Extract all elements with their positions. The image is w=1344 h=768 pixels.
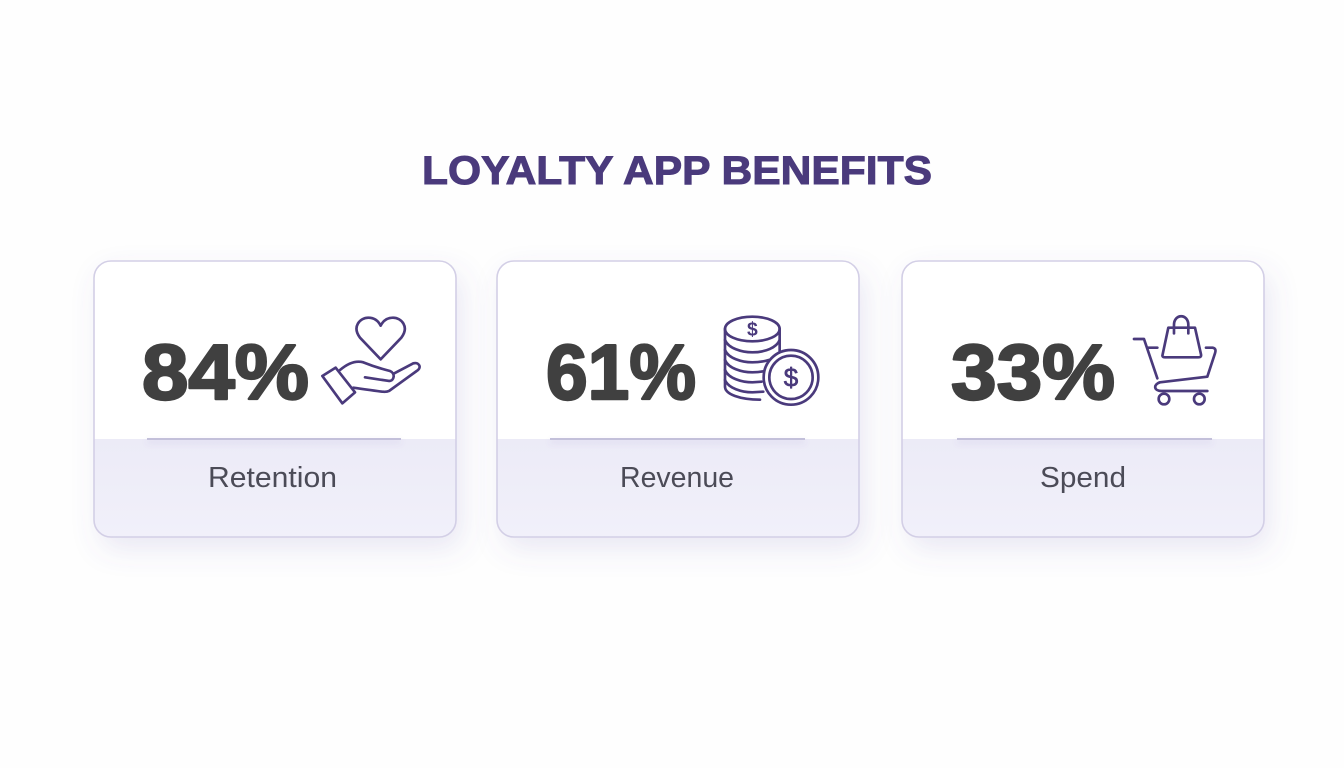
icon: coin stack: [725, 317, 818, 405]
card border: [497, 261, 859, 537]
divider: [550, 438, 805, 440]
stat: 61%: 61%: [546, 328, 696, 416]
card border: [94, 261, 456, 537]
panel: spend: [902, 261, 1264, 537]
card border: [902, 261, 1264, 537]
stat: 33%: 33%: [951, 328, 1115, 416]
divider: [147, 438, 401, 440]
panel: retention: [94, 261, 456, 537]
card lower band: [497, 439, 859, 537]
label: revenue: Revenue: [620, 462, 734, 494]
icon: dollar sign, large coin: $: [784, 363, 799, 393]
card background: [497, 261, 859, 537]
card background: [94, 261, 456, 537]
icon: shopping cart with bag: [1134, 316, 1215, 404]
label: retention: Retention: [208, 462, 337, 494]
label: spend: Spend: [1040, 462, 1126, 494]
card lower band: [94, 439, 456, 537]
title: LOYALTY APP BENEFITS: [422, 149, 932, 193]
card background: [902, 261, 1264, 537]
card lower band: [902, 439, 1264, 537]
panel: revenue: [497, 261, 859, 537]
divider: [957, 438, 1212, 440]
icon: heart in hand: [322, 318, 420, 403]
stat: 84%: 84%: [142, 328, 309, 416]
icon: dollar sign, stack: $: [747, 320, 758, 341]
